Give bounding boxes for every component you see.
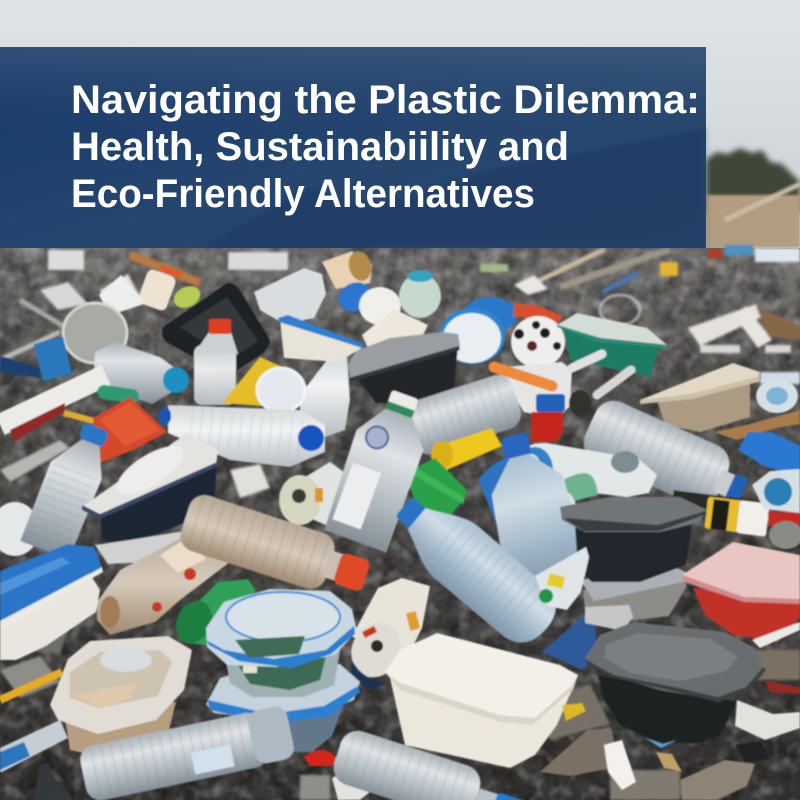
black square lid	[162, 283, 270, 374]
tan bottle with orange stains	[97, 530, 230, 635]
clear bottle centre lower	[381, 481, 569, 654]
round clear food tub upper	[206, 589, 357, 697]
background: distant litter ground	[0, 245, 800, 800]
plate behind bottles	[95, 530, 200, 564]
yellow stick	[0, 672, 62, 700]
red cap and white paper	[304, 750, 370, 800]
far round disc	[0, 303, 127, 381]
plastic waste pile	[0, 249, 800, 800]
title text: Eco-Friendly Alternatives	[71, 172, 535, 216]
green tray	[405, 458, 467, 522]
red container with pink lid	[682, 542, 800, 642]
far cluster: clear bottle and cups	[99, 249, 441, 361]
upright clear bottle with red cap	[194, 319, 238, 405]
big white bottle with blue cap	[159, 405, 325, 467]
green cup	[169, 579, 256, 649]
white tray with blue rim	[278, 315, 364, 362]
white round lid	[257, 368, 305, 412]
title text: Health, Sustainabiility and	[71, 125, 569, 169]
blue lid white tray	[0, 544, 103, 660]
white clamshell tray	[385, 633, 578, 768]
beige container	[640, 363, 760, 432]
dark object bottom left	[34, 763, 74, 800]
teal container	[557, 313, 667, 377]
foreground scraps	[540, 622, 800, 800]
white funnel with yellow tag	[535, 547, 589, 610]
spray can	[342, 578, 430, 690]
clear bottle with cyan cap	[94, 342, 189, 404]
clear food box with tan contents	[50, 636, 192, 756]
orange-red box	[93, 397, 167, 463]
white cup fragments at right	[752, 469, 800, 549]
bottle with blue cap centre	[473, 425, 590, 594]
black lidded container lower	[585, 622, 766, 743]
white cup left edge	[0, 502, 39, 556]
yellow tube	[431, 428, 502, 472]
front bottle bottom left	[77, 704, 296, 800]
white pipe	[0, 375, 106, 425]
black lidded container upper	[560, 497, 707, 582]
bottle bottom centre with blue cap	[329, 726, 532, 800]
white labelled bottle	[478, 443, 657, 532]
blue lid disc and plates	[439, 297, 563, 364]
title text	[71, 78, 700, 216]
white lid, navy container	[82, 433, 218, 548]
tall upright bottle with white cap	[320, 383, 439, 553]
green tube and yellow scraps	[10, 384, 140, 442]
clear bottle left with blue cap	[20, 416, 119, 560]
spotted ball	[511, 316, 565, 368]
background: sky and horizon	[0, 0, 800, 251]
glue bottle	[671, 490, 800, 537]
thin bottle left bottom	[0, 720, 68, 772]
title text: Navigating the Plastic Dilemma:	[71, 78, 700, 122]
round clear food tub lower	[206, 664, 360, 752]
clear bottle horizontal centre-right	[401, 371, 525, 459]
light green spool	[543, 473, 598, 526]
red-cap bottle	[176, 491, 375, 605]
red bottle with blue cap	[531, 394, 565, 442]
white spool pipes	[494, 354, 631, 420]
grey container	[580, 565, 688, 624]
right blue fragments	[714, 379, 800, 476]
blue box fragment	[542, 608, 598, 670]
silver screw cap	[585, 605, 633, 631]
spool and milky jug left of centre	[279, 462, 358, 526]
upright milky bottle with blue cap	[300, 337, 352, 437]
black and grey lidded container	[348, 332, 460, 403]
title banner	[0, 47, 706, 248]
yellow wedge	[222, 357, 285, 406]
clear bottle lower right	[577, 394, 756, 521]
